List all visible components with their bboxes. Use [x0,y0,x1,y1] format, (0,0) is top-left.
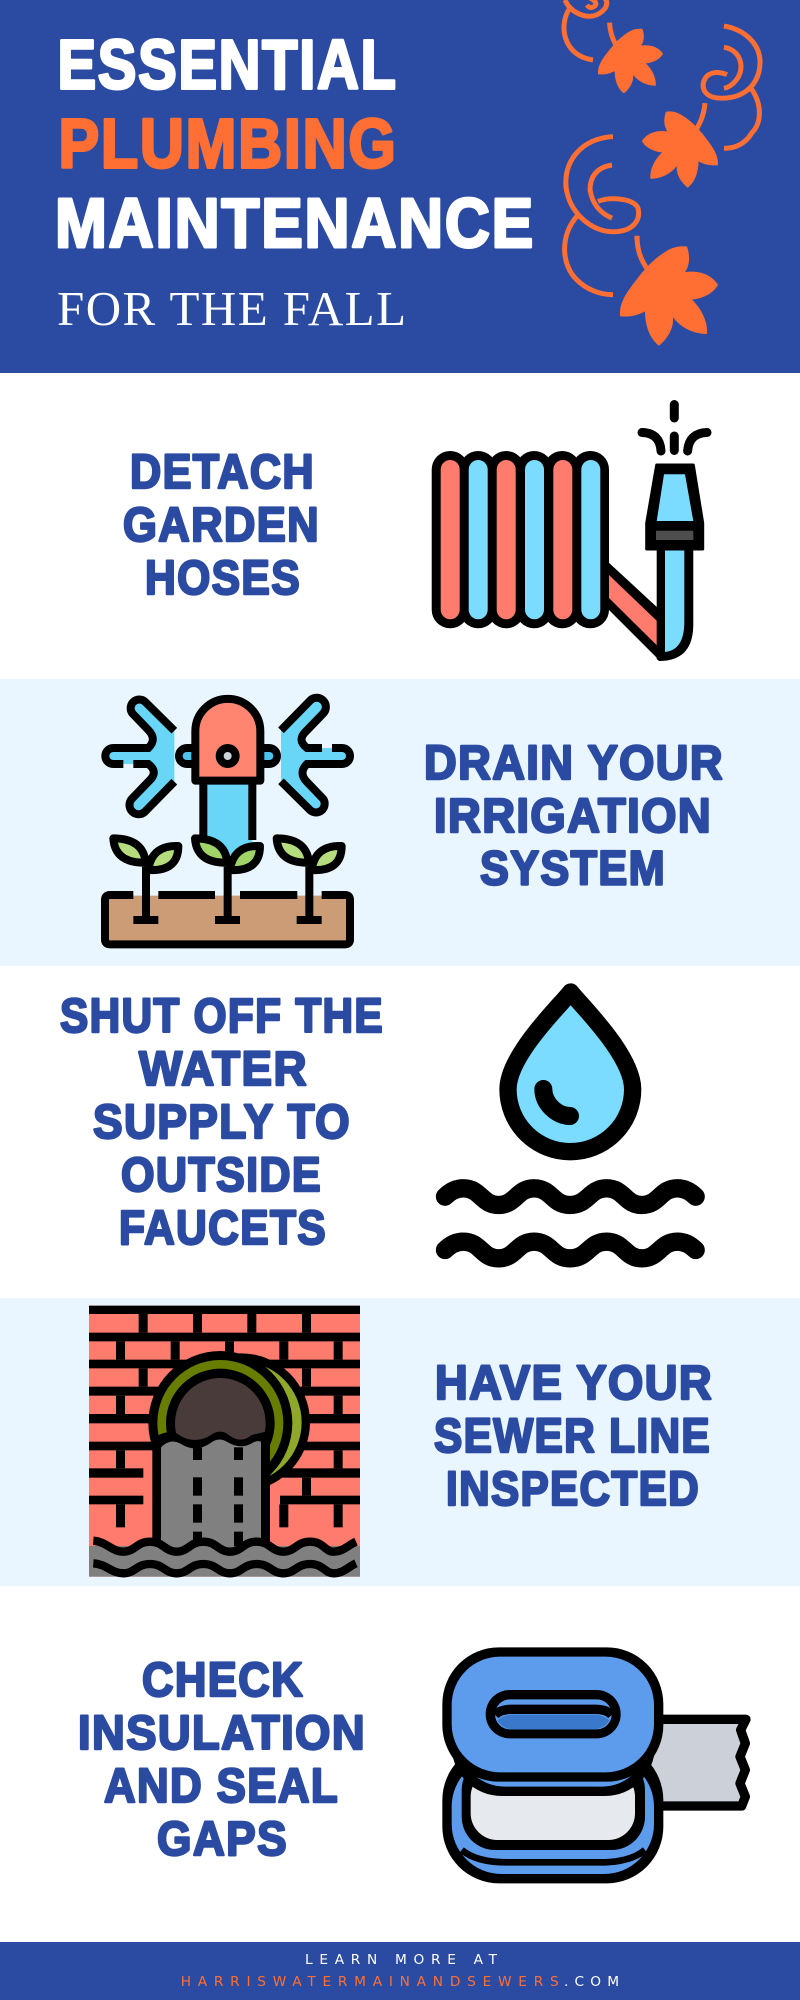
panel: footer [0,1942,800,2000]
heading: detach garden hoses: GARDEN [123,499,320,552]
icon: water drop and waves [445,992,696,1258]
left water spray [105,700,174,814]
heading: check insulation and seal gaps: INSULATION [78,1707,366,1760]
icon: sprinkler and seedlings [105,698,350,944]
heading: detach garden hoses: HOSES [145,552,301,605]
bottom flange [442,1743,663,1883]
heading: drain your irrigation system: DRAIN YOUR [424,737,724,790]
brick wall [89,1306,360,1577]
heading: shut off the water supply to outside faucets: SUPPLY TO [93,1096,351,1149]
icon: garden hose reel [432,404,707,661]
panel: have your sewer line inspected [0,1298,800,1586]
heading: check insulation and seal gaps: AND SEAL [104,1760,339,1813]
footer: website url: .COM [564,1974,619,1990]
panel: check insulation and seal gaps [0,1586,800,1942]
outflow of water [152,1431,270,1547]
pipe opening [148,1351,310,1495]
tape roll [462,1757,645,1850]
title: essential plumbing maintenance: MAINTENANCE [55,184,535,262]
footer: website url: HARRISWATERMAINANDSEWERS [181,1974,559,1990]
heading: drain your irrigation system: SYSTEM [480,842,666,896]
panel: drain your irrigation system [0,679,800,966]
heading: detach garden hoses: DETACH [130,446,315,499]
heading: shut off the water supply to outside faucets: WATER [139,1043,308,1096]
heading: drain your irrigation system [424,737,724,896]
title: essential plumbing maintenance: ESSENTIAL [58,26,398,104]
heading: detach garden hoses [123,446,320,605]
title: essential plumbing maintenance: PLUMBING [58,104,398,182]
tape strip [643,1719,746,1806]
footer: learn more at: LEARN MORE AT [305,1952,498,1968]
heading: check insulation and seal gaps: GAPS [157,1813,288,1866]
stem and sprinkler head [175,699,281,857]
right water spray [281,698,350,812]
spool hole [486,1690,621,1738]
heading: shut off the water supply to outside faucets: OUTSIDE [121,1149,322,1202]
icon: sewer outfall pipe in brick wall [89,1306,360,1577]
heading: have your sewer line inspected [434,1357,713,1516]
icon: autumn leaves and swirls [564,0,760,346]
heading: have your sewer line inspected: HAVE YOUR [435,1357,713,1410]
pool of water [89,1541,360,1577]
heading: check insulation and seal gaps [78,1654,366,1866]
heading: shut off the water supply to outside faucets: FAUCETS [119,1202,327,1255]
title: essential plumbing maintenance [55,26,535,262]
top flange [442,1647,663,1796]
panel: shut off the water supply [0,966,800,1298]
seedlings [113,838,342,920]
heading: drain your irrigation system: IRRIGATION [434,790,712,843]
panel: header [0,0,800,373]
panel: detach garden hoses [0,373,800,679]
heading: check insulation and seal gaps: CHECK [142,1654,304,1707]
heading: have your sewer line inspected: INSPECTED [446,1463,700,1516]
heading: shut off the water supply to outside faucets [60,990,384,1255]
subtitle: FOR THE FALL [57,281,406,336]
heading: shut off the water supply to outside faucets: SHUT OFF THE [60,990,384,1043]
heading: have your sewer line inspected: SEWER LINE [434,1410,711,1463]
icon: roll of sealing tape [442,1647,746,1883]
soil bed [105,895,350,944]
